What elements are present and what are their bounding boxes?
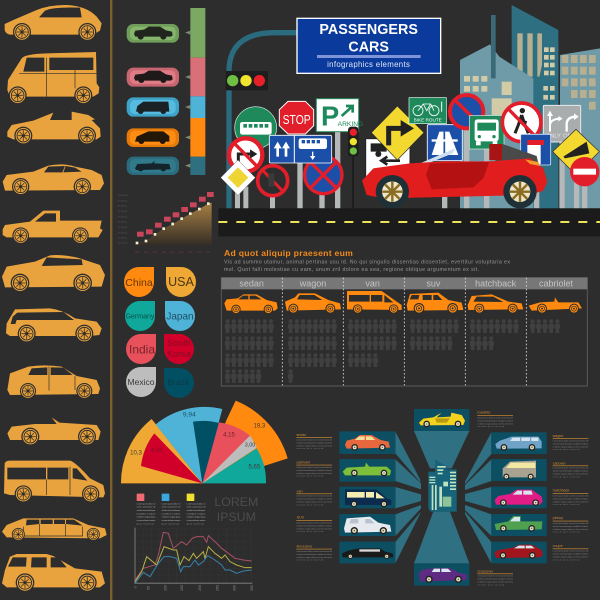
year labels: 2000 xyxy=(179,252,184,254)
legend: red: ut enim ad minim veniam xyxy=(137,519,156,522)
pie value labels: 10,3 xyxy=(130,451,142,457)
caption: wagon xyxy=(553,434,589,451)
sign: parking: ARKING xyxy=(338,121,363,128)
caption: roadster: Lorem ipsum dolor sit amet consectetur elit xyxy=(477,416,513,419)
caption: wagon: et dolore magna aliqua ut enim ad minim xyxy=(553,445,589,448)
caption: cabriolet: Lorem ipsum dolor sit amet consectetur elit xyxy=(296,466,332,469)
caption: roadster: sed do eiusmod tempor incididunt ut labore xyxy=(477,419,514,422)
caption: hatchback xyxy=(553,489,589,506)
legend: blue: ut enim ad minim veniam xyxy=(162,519,181,522)
sign: no pedestrians xyxy=(502,103,541,142)
car: SUV orange xyxy=(407,293,463,314)
chart: rising area with flags xyxy=(118,192,214,254)
sign: bus stop round xyxy=(235,107,277,149)
caption: crossover: Lorem ipsum dolor sit amet consectetur elit xyxy=(477,575,513,578)
sign: lanes and bus xyxy=(269,135,332,163)
caption: limousine: limousine xyxy=(297,544,312,548)
legend: yellow: incididunt ut labore xyxy=(187,512,206,515)
line chart: 200 xyxy=(198,585,202,591)
traffic light large xyxy=(226,71,268,90)
caption: sedan xyxy=(296,433,333,450)
teardrop: Brazil: Brazil xyxy=(167,377,189,387)
sign: right turn yellow diamond xyxy=(371,106,424,160)
car: crossover silhouette xyxy=(2,255,105,292)
caption: cabover: cabover xyxy=(553,461,566,465)
car: SUV silhouette xyxy=(2,554,105,592)
caption: van: et dolore magna aliqua ut enim ad minim xyxy=(296,501,332,504)
connector wedges xyxy=(395,431,491,563)
legend: yellow: Lorem ipsum dolor sit xyxy=(187,502,206,505)
legend: red xyxy=(137,494,156,525)
wedge: teal 5,65 xyxy=(202,448,266,483)
sign: bus green xyxy=(469,116,504,149)
panel: limousine xyxy=(339,542,395,563)
year labels: 1960 xyxy=(161,252,167,254)
teardrop: Japan: Japan xyxy=(166,312,194,322)
car: limousine silhouette xyxy=(2,518,107,541)
legend: blue xyxy=(162,494,181,525)
caption: pickup: Lorem ipsum dolor sit amet consectetur elit xyxy=(553,522,589,525)
caption: roadster: veniam quis nostrud xyxy=(477,425,504,428)
sign: priority diamond xyxy=(221,160,255,195)
pill: orange SUV xyxy=(127,128,179,147)
car: hatchback silhouette xyxy=(5,5,102,41)
teardrop: South Korea xyxy=(164,334,194,364)
caption: coupe: Lorem ipsum dolor sit amet consectetur elit xyxy=(553,550,589,553)
caption: wagon: veniam quis nostrud xyxy=(553,448,579,451)
people pictograms xyxy=(225,319,560,383)
table frame xyxy=(221,278,587,386)
caption: crossover: et dolore magna aliqua ut enim ad minim xyxy=(477,581,513,584)
car: hatchback orange xyxy=(468,294,523,314)
caption: coupe: sed do eiusmod tempor incididunt ut labore xyxy=(553,553,589,556)
panel: van xyxy=(339,487,395,508)
sign: no parking blue xyxy=(450,95,483,128)
wedge: blue 9,94 xyxy=(156,407,222,483)
caption: van: van xyxy=(297,489,303,493)
car: wagon silhouette xyxy=(6,308,102,343)
lorem ipsum title xyxy=(214,495,258,524)
wedge: grey 3,00 xyxy=(202,436,257,483)
chart: radial pie xyxy=(121,401,288,483)
caption: hatchback: et dolore magna aliqua ut enim ad minim xyxy=(553,500,589,503)
caption: roadster: roadster xyxy=(477,411,492,415)
caption: pickup: pickup xyxy=(553,516,563,520)
teardrop: Germany: Germany xyxy=(126,314,155,320)
car: roadster silhouette xyxy=(7,417,101,446)
sign: only lanes xyxy=(543,105,581,142)
caption: limousine: Lorem ipsum dolor sit amet consectetur elit xyxy=(296,550,332,553)
y axis labels: 30 000000 xyxy=(118,232,128,234)
panel: people per car type table xyxy=(221,248,587,386)
pie value labels xyxy=(130,411,266,471)
caption: van: veniam quis nostrud xyxy=(296,503,323,506)
y axis labels: 90 000000 xyxy=(118,200,128,202)
table header: sedan xyxy=(239,278,264,288)
caption: pickup: veniam quis nostrud xyxy=(553,531,579,534)
year labels: 2005 xyxy=(188,252,193,254)
caption: limousine xyxy=(296,544,333,562)
road xyxy=(218,208,600,236)
caption: cabover: veniam quis nostrud xyxy=(553,475,579,478)
divider between car column and charts xyxy=(110,0,112,600)
column cars xyxy=(224,291,582,314)
stacked vertical bar xyxy=(185,8,205,175)
table header: van xyxy=(365,278,380,288)
people: hatchback xyxy=(470,319,519,350)
line chart: 350 xyxy=(250,585,254,591)
wedge: yellow 10,3 xyxy=(121,419,202,483)
caption: pickup xyxy=(553,516,589,534)
area xyxy=(135,203,212,245)
caption: cabriolet: veniam quis nostrud xyxy=(296,475,323,478)
legend: red: quis nostrud xyxy=(137,522,153,525)
y axis labels: 70 000000 xyxy=(118,216,128,218)
teardrop: South Korea: South xyxy=(167,338,191,348)
legend: yellow: quis nostrud xyxy=(187,522,203,525)
table header: cabriolet xyxy=(539,278,573,288)
line chart: 250 xyxy=(215,585,219,591)
caption: coupe: coupe xyxy=(553,544,563,548)
pie value labels: 4,66 xyxy=(151,448,163,454)
caption: limousine: et dolore magna aliqua ut enim ad minim xyxy=(296,556,332,559)
panel: pickup xyxy=(491,514,547,536)
car: coupe silhouette xyxy=(3,164,104,195)
legend: yellow: ut enim ad minim veniam xyxy=(187,519,206,522)
legend: red: incididunt ut labore xyxy=(137,512,156,515)
y axis labels: 60 000000 xyxy=(118,222,128,224)
caption: SUV: et dolore magna aliqua ut enim ad minim xyxy=(296,527,332,530)
pie value labels: 5,65 xyxy=(249,465,261,471)
caption: limousine: veniam quis nostrud xyxy=(296,559,323,562)
caption: cabriolet xyxy=(296,461,333,478)
caption: wagon: sed do eiusmod tempor incididunt ut labore xyxy=(553,442,589,445)
legend: red: Lorem ipsum dolor sit xyxy=(137,502,156,505)
caption: roadster: et dolore magna aliqua ut enim ad minim xyxy=(477,422,513,425)
people: wagon xyxy=(288,319,337,383)
sign: no stopping dark xyxy=(258,166,288,196)
teardrop: India: India xyxy=(129,342,155,356)
car: van orange xyxy=(347,291,402,314)
car: van silhouette xyxy=(7,52,99,104)
panel: wagon xyxy=(491,432,547,454)
caption: hatchback: Lorem ipsum dolor sit amet consectetur elit xyxy=(553,494,589,497)
title sign: infographics elements xyxy=(327,60,410,69)
table header: wagon xyxy=(299,278,326,288)
caption: crossover: crossover xyxy=(477,569,494,573)
sign: bike route: BIKE ROUTE xyxy=(414,117,442,122)
title sign xyxy=(297,18,441,73)
caption: sedan: veniam quis nostrud xyxy=(296,447,323,450)
car: wagon orange xyxy=(285,293,341,314)
wedge: orange 19,3 xyxy=(202,401,288,483)
year labels: 1980 xyxy=(170,252,175,254)
paragraph: Vis ad summo utamur, animal pertinax usu id. No qui singulis dissentias dissentiet, evertitur voluptaria ex xyxy=(224,259,510,265)
year labels xyxy=(135,252,211,254)
caption: pickup: sed do eiusmod tempor incididunt ut labore xyxy=(553,525,589,528)
caption: crossover xyxy=(477,569,514,586)
y axis labels xyxy=(118,195,129,244)
sign: only lanes: ONLY xyxy=(546,133,561,139)
caption: SUV: sed do eiusmod tempor incididunt ut labore xyxy=(296,524,333,527)
red convertible car xyxy=(362,144,547,208)
car: minibus silhouette xyxy=(4,461,105,503)
panel: cabriolet xyxy=(339,459,395,482)
wedge: dark teal xyxy=(193,421,219,483)
caption: coupe: et dolore magna aliqua ut enim ad minim xyxy=(553,556,589,559)
caption: cabover: sed do eiusmod tempor incididunt ut labore xyxy=(553,470,589,473)
people: van xyxy=(348,319,397,367)
caption: van xyxy=(296,489,333,506)
panel: hatchback xyxy=(491,487,547,508)
line chart: 100 xyxy=(163,585,167,591)
lorem ipsum title: IPSUM xyxy=(217,510,256,524)
line chart xyxy=(134,528,254,591)
paragraph: mel. Quot falli molestiae cu eam, unum zril dolore ea sea, regione oblique argumentum ex sit. xyxy=(224,267,479,273)
panel: line chart with legend xyxy=(134,494,258,591)
year labels: 1900 xyxy=(144,252,149,254)
buildings skyline xyxy=(460,5,600,208)
wedge: coral 4,15 xyxy=(202,422,250,483)
panel: top six orange car silhouettes xyxy=(2,5,105,292)
year labels: 1910 xyxy=(152,252,158,254)
legend: blue: amet consectetur elit xyxy=(162,506,181,509)
car: pickup silhouette xyxy=(3,211,103,244)
people: sedan xyxy=(225,319,274,383)
title sign: PASSENGERS xyxy=(319,22,418,38)
caption: hatchback: hatchback xyxy=(553,489,570,493)
teardrop: South Korea: Korea xyxy=(167,349,191,359)
panel: sedan xyxy=(339,431,395,454)
caption: roadster xyxy=(477,411,514,428)
legend: blue: sed do eiusmod tempor xyxy=(162,509,181,512)
panel: SUV xyxy=(339,514,395,536)
people: cabriolet xyxy=(530,319,560,333)
y axis labels: 10 000000 xyxy=(118,242,128,244)
y axis labels: 75 000000 xyxy=(118,211,128,213)
pie value labels: 3,00 xyxy=(245,443,255,449)
car: sedan silhouette xyxy=(7,365,100,399)
panel: cabover xyxy=(491,459,547,481)
line chart: 50 xyxy=(147,586,151,590)
year labels: 2015 xyxy=(206,252,211,254)
legend: red: amet consectetur elit xyxy=(137,506,156,509)
pill: pink wagon xyxy=(127,68,179,87)
sign poles xyxy=(235,127,587,208)
panel: roadster xyxy=(414,409,469,431)
sign: bike route xyxy=(409,98,446,124)
caption: SUV: Lorem ipsum dolor sit amet consectetur elit xyxy=(296,521,332,524)
caption: cabriolet: et dolore magna aliqua ut enim ad minim xyxy=(296,472,332,475)
teardrop: China: China xyxy=(125,277,153,289)
teardrop: Mexico: Mexico xyxy=(128,377,155,387)
panel: country teardrops xyxy=(124,267,196,398)
sign: stop xyxy=(279,101,314,134)
legend: red: sed do eiusmod tempor xyxy=(137,509,156,512)
caption: cabriolet: cabriolet xyxy=(296,461,310,465)
sign: motorway xyxy=(427,125,462,161)
pill: teal cabriolet xyxy=(127,157,179,175)
line chart: 0 xyxy=(134,586,138,588)
car: convertible silhouette xyxy=(7,112,101,145)
caption: cabover xyxy=(553,461,589,478)
legend: yellow: sed do eiusmod tempor xyxy=(187,509,206,512)
table header: hatchback xyxy=(475,278,517,288)
sign: parking xyxy=(316,99,363,132)
legend: yellow xyxy=(187,494,206,525)
caption: sedan: et dolore magna aliqua ut enim ad minim xyxy=(296,444,332,447)
line chart: 300 xyxy=(233,585,237,591)
sign: blue no parking X xyxy=(305,156,342,194)
caption: hatchback: veniam quis nostrud xyxy=(553,503,579,506)
car: sedan orange xyxy=(224,294,278,314)
caption: sedan: Lorem ipsum dolor sit amet consectetur elit xyxy=(296,438,332,441)
caption: SUV xyxy=(296,516,333,533)
y axis labels: 80 000000 xyxy=(118,206,128,208)
pill: blue van xyxy=(127,97,179,117)
city centre xyxy=(428,459,457,512)
caption: crossover: veniam quis nostrud xyxy=(477,583,504,586)
legend: yellow: amet consectetur elit xyxy=(187,506,206,509)
caption: wagon: wagon xyxy=(553,434,563,438)
heading: Ad quot aliquip praesent eum xyxy=(224,248,353,258)
lorem ipsum title: LOREM xyxy=(214,495,258,509)
pie value labels: 19,3 xyxy=(254,424,266,430)
year labels: 1880 xyxy=(135,252,140,254)
table header xyxy=(221,278,587,289)
sign: dead end xyxy=(521,134,551,165)
caption: sedan: sedan xyxy=(296,433,306,437)
y axis labels: 100 000000 xyxy=(118,195,129,197)
caption: van: Lorem ipsum dolor sit amet consectetur elit xyxy=(296,495,332,498)
legend: red: et dolore magna aliqua xyxy=(137,516,156,519)
caption: sedan: sed do eiusmod tempor incididunt ut labore xyxy=(296,441,333,444)
title sign: CARS xyxy=(348,39,389,55)
sign: no right turn xyxy=(229,138,262,172)
traffic light small xyxy=(348,127,359,208)
sign: parking: P xyxy=(321,100,339,131)
legend: blue: Lorem ipsum dolor sit xyxy=(162,502,181,505)
paragraph xyxy=(224,259,510,273)
legend: blue: incididunt ut labore xyxy=(162,512,181,515)
sign: stop: STOP xyxy=(283,113,311,127)
caption: limousine: sed do eiusmod tempor incididunt ut labore xyxy=(296,553,333,556)
gantry arm xyxy=(229,33,297,208)
caption: cabriolet: sed do eiusmod tempor incididunt ut labore xyxy=(296,469,333,472)
sign: only lanes: ONLY xyxy=(563,133,578,139)
y axis labels: 40 000000 xyxy=(118,227,128,229)
sign: white detour xyxy=(366,139,410,177)
pill: green sedan xyxy=(127,24,179,43)
legend: blue: et dolore magna aliqua xyxy=(162,516,181,519)
caption: wagon: Lorem ipsum dolor sit amet consectetur elit xyxy=(553,439,589,442)
caption: van: sed do eiusmod tempor incididunt ut labore xyxy=(296,498,333,501)
legend: yellow: et dolore magna aliqua xyxy=(187,516,206,519)
sign: steep hill diamond xyxy=(553,129,599,175)
caption: coupe: veniam quis nostrud xyxy=(553,558,579,561)
panel: bottom six orange car silhouettes xyxy=(2,308,107,592)
caption: cabover: Lorem ipsum dolor sit amet consectetur elit xyxy=(553,467,589,470)
panel: colour bar with car pills xyxy=(127,8,205,175)
data points xyxy=(136,202,210,244)
line chart: 150 xyxy=(180,585,184,591)
caption: SUV: SUV xyxy=(297,516,305,520)
flags xyxy=(137,192,214,237)
teardrop: USA: USA xyxy=(168,275,195,289)
pie value labels: 4,15 xyxy=(223,433,235,439)
caption: hatchback: sed do eiusmod tempor incididunt ut labore xyxy=(553,497,589,500)
panel: street scene xyxy=(218,5,600,236)
pie value labels: 9,94 xyxy=(183,411,196,418)
wedge: red 4,66 xyxy=(141,433,202,483)
legend: blue: quis nostrud xyxy=(162,522,178,525)
panel: car types around city xyxy=(296,409,589,586)
panel: crossover xyxy=(414,563,469,586)
caption: cabover: et dolore magna aliqua ut enim ad minim xyxy=(553,473,589,476)
caption: coupe xyxy=(553,544,589,561)
sign: no entry xyxy=(570,157,599,186)
caption: pickup: et dolore magna aliqua ut enim ad minim xyxy=(553,528,589,531)
panel: coupe xyxy=(491,542,547,563)
people: suv xyxy=(410,319,459,350)
caption: crossover: sed do eiusmod tempor incididunt ut labore xyxy=(477,578,514,581)
y axis labels: 20 000000 xyxy=(118,237,128,239)
year labels: 2010 xyxy=(197,252,202,254)
car: cabriolet orange xyxy=(529,297,582,314)
caption: SUV: veniam quis nostrud xyxy=(296,530,323,533)
table header: suv xyxy=(426,278,441,288)
